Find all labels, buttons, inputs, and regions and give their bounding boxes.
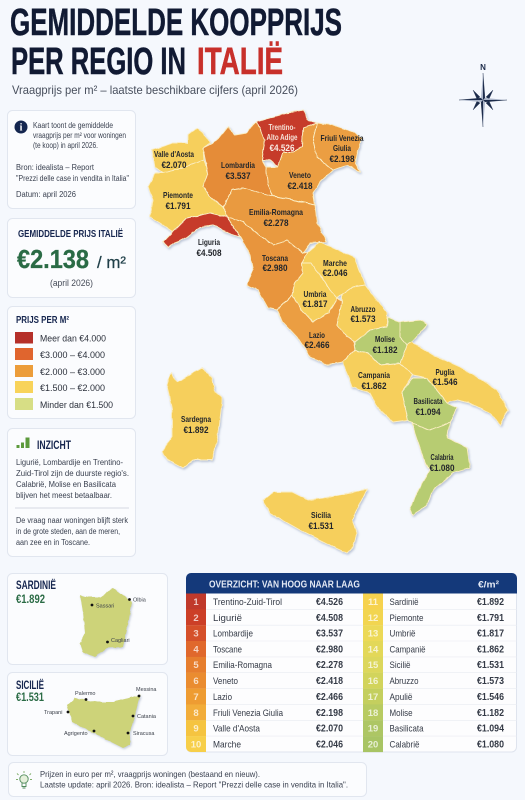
rank 9: Valle d'Aosta — [213, 724, 261, 734]
label: Trentino-Alto Adige: €4.526 — [270, 143, 294, 154]
panel: insight — [8, 428, 136, 556]
label: Liguria: Liguria — [198, 237, 220, 247]
legend item: 3000-4000: €3.000 – €4.000 — [40, 350, 105, 361]
rank 12: 12 — [368, 613, 378, 624]
legend item: below 1500: Minder dan €1.500 — [40, 400, 113, 411]
rank 18: €1.182 — [477, 708, 504, 719]
label: Lombardia: €3.537 — [226, 171, 250, 182]
panel: Sardinia inset — [8, 574, 168, 664]
label: Piemonte: Piemonte — [163, 190, 193, 200]
rank 1: €4.526 — [316, 597, 343, 608]
label: Umbria: €1.817 — [302, 299, 328, 310]
label: Umbria: Umbria — [304, 289, 327, 299]
label: Abruzzo: €1.573 — [350, 314, 376, 325]
label: Abruzzo: Abruzzo — [350, 304, 376, 314]
label: Lombardia: Lombardia — [221, 160, 255, 170]
rank 13: 13 — [368, 628, 378, 640]
rank 11: 11 — [368, 597, 379, 608]
rank 8 — [186, 704, 343, 720]
subtitle: Vraagprijs per m² – laatste beschikbare cijfers (april 2026) — [12, 83, 298, 97]
info description: vraagprijs per m² voor woningen — [33, 131, 126, 140]
insight text 1: Calabrië, Molise en Basilicata — [16, 480, 117, 489]
legend heading: PRIJS PER M² — [16, 314, 69, 326]
label: Liguria: €4.508 — [196, 248, 222, 259]
rank 14: 14 — [368, 644, 379, 656]
table header: €/m² — [478, 580, 499, 590]
rank 14: €1.862 — [477, 644, 504, 656]
rank 4 — [186, 641, 343, 657]
label: Basilicata: Basilicata — [414, 396, 443, 406]
rank 5: €2.278 — [316, 660, 343, 671]
footer text — [40, 769, 348, 790]
Sicily heading — [16, 679, 44, 704]
rank 11: Sardinië — [390, 597, 418, 608]
label: Liguria — [196, 237, 222, 259]
label: Campania: €1.862 — [362, 381, 386, 392]
insight heading: INZICHT — [37, 438, 71, 452]
icon: light bulb — [16, 771, 32, 788]
rank 15: Sicilië — [390, 660, 410, 671]
average value: €2.138 — [17, 244, 89, 274]
panel: ranking table — [186, 573, 517, 752]
label: Puglia — [432, 367, 458, 388]
rank 10 — [186, 736, 343, 752]
rank 15 — [363, 657, 504, 673]
label: Emilia-Romagna: Emilia-Romagna — [249, 207, 303, 217]
rank 1 — [186, 594, 343, 610]
legend item: 2000-3000: €2.000 – €3.000 — [40, 367, 105, 378]
label: Veneto — [288, 170, 312, 192]
label: Sardegna — [181, 414, 211, 436]
Sardinia cities: Cagliari — [111, 638, 130, 644]
rank 15: €1.531 — [477, 660, 504, 671]
rank 9 — [186, 720, 343, 736]
map of Italy — [148, 110, 508, 553]
label: Toscana — [262, 253, 288, 274]
Sicily cities: Agrigento — [64, 731, 88, 737]
rank 5: Emilia-Romagna — [213, 660, 273, 671]
title: PER REGIO IN — [11, 41, 186, 83]
rank 2: Ligurië — [213, 613, 242, 624]
rank 17 — [363, 689, 504, 705]
rank 16 — [363, 673, 504, 689]
label: Calabria: €1.080 — [430, 463, 454, 474]
rank 5 — [186, 657, 343, 673]
source and date — [16, 163, 129, 199]
rank 7: Lazio — [213, 692, 232, 703]
rank 12: €1.791 — [477, 613, 504, 624]
Sicily cities: Trapani — [44, 710, 62, 716]
insight text 2: in de grote steden, aan de meren, — [16, 527, 120, 536]
label: Lazio: €2.466 — [304, 340, 330, 351]
rank 10: 10 — [191, 740, 201, 750]
Sicily cities — [44, 687, 157, 737]
rank 7 — [186, 689, 343, 705]
label: Basilicata — [414, 396, 443, 418]
table header — [186, 573, 517, 594]
label: Molise: €1.182 — [372, 345, 398, 356]
rank 18: 18 — [368, 708, 378, 719]
rank 3: 3 — [193, 628, 199, 640]
average value: / m² — [97, 253, 126, 272]
rank 10: Marche — [213, 740, 241, 750]
rank 9: 9 — [193, 724, 199, 734]
Sardinia heading: €1.892 — [16, 594, 45, 606]
rank 17: 17 — [368, 692, 378, 703]
label: Friuli Venezia Giulia: Giulia — [333, 143, 351, 153]
panel: average price — [8, 218, 136, 298]
legend item: 1500-2000: €1.500 – €2.000 — [40, 383, 105, 394]
label: Friuli Venezia Giulia: Friuli Venezia — [320, 133, 364, 143]
Sicily island — [67, 695, 140, 748]
title: ITALIË — [197, 40, 283, 83]
info description: (te koop) in april 2026. — [33, 141, 98, 150]
label: Friuli Venezia Giulia: €2.198 — [330, 154, 354, 165]
rank 8: €2.198 — [316, 708, 343, 719]
average heading: GEMIDDELDE PRIJS ITALIË — [18, 227, 123, 240]
rank 8: 8 — [193, 708, 199, 719]
rank 18: Molise — [390, 708, 412, 719]
rank 3: €3.537 — [316, 628, 343, 640]
label: Toscana: €2.980 — [262, 263, 288, 274]
label: Emilia-Romagna: €2.278 — [264, 218, 288, 229]
label: Sardegna: Sardegna — [181, 414, 211, 424]
rank 13: Umbrië — [390, 628, 416, 640]
rank 2 — [186, 609, 343, 625]
label: Lazio: Lazio — [309, 330, 325, 340]
label: Veneto: Veneto — [289, 170, 311, 180]
label: Valle d'Aosta: Valle d'Aosta — [154, 149, 194, 159]
rank 16: €1.573 — [477, 676, 504, 687]
label: Sicilia: Sicilia — [311, 510, 331, 520]
legend item: above 4000: Meer dan €4.000 — [40, 334, 106, 344]
rank 20: Calabrië — [390, 740, 420, 750]
icon: compass rose: N — [480, 63, 486, 72]
rank 9: €2.070 — [316, 724, 343, 734]
map regions — [148, 110, 508, 553]
rank 14: Campanië — [390, 644, 426, 656]
rank 19: €1.094 — [477, 724, 504, 734]
label: Piemonte — [163, 190, 193, 212]
rank 20 — [363, 736, 504, 752]
rank 16: Abruzzo — [390, 676, 418, 687]
rank 1: 1 — [193, 597, 199, 608]
Sardinia heading — [16, 579, 56, 606]
insight text 1: Zuid-Tirol zijn de duurste regio's. — [16, 469, 129, 478]
label: Piemonte: €1.791 — [166, 201, 191, 212]
icon: bars — [16, 438, 30, 448]
rank 15: 15 — [368, 660, 379, 671]
source and date: Bron: idealista – Report — [16, 163, 95, 172]
label: Lazio — [304, 330, 330, 351]
rank 2: €4.508 — [316, 613, 343, 624]
Sicily heading: €1.531 — [16, 692, 44, 704]
label: Trentino-Alto Adige: Trentino- — [268, 122, 296, 132]
label: Valle d'Aosta: €2.070 — [162, 160, 186, 171]
rank 6 — [186, 673, 343, 689]
rank 6: Veneto — [213, 676, 238, 687]
rank 20: €1.080 — [477, 740, 504, 750]
title — [10, 2, 342, 83]
panel: footer note — [8, 762, 366, 796]
Sicily cities: Siracusa — [133, 731, 155, 737]
table header: OVERZICHT: VAN HOOG NAAR LAAG — [209, 578, 360, 590]
Sardinia cities — [91, 598, 147, 644]
Sicily heading: SICILIË — [16, 679, 44, 692]
rank 8: Friuli Venezia Giulia — [213, 708, 284, 719]
rank 14 — [363, 641, 504, 657]
rank 12 — [363, 609, 504, 625]
label: Marche: Marche — [323, 258, 347, 268]
label: Molise — [372, 334, 398, 356]
rank 3 — [186, 625, 343, 641]
Sicily cities: Palermo — [75, 691, 95, 697]
label: Friuli Venezia Giulia — [320, 133, 364, 165]
label: Basilicata: €1.094 — [416, 407, 441, 418]
rank 12: Piemonte — [390, 613, 424, 624]
rank 6: €2.418 — [316, 676, 343, 687]
label: Marche: €2.046 — [322, 268, 348, 279]
label: Campania — [358, 370, 390, 392]
source and date: "Prezzi delle case in vendita in Italia" — [16, 174, 129, 183]
label: Sardegna: €1.892 — [184, 425, 208, 436]
label: Sicilia: €1.531 — [308, 521, 334, 532]
rank 16: 16 — [368, 676, 378, 687]
label: Toscana: Toscana — [262, 253, 288, 263]
label: Calabria — [430, 452, 454, 474]
title: GEMIDDELDE KOOPPRIJS — [10, 2, 342, 44]
rank 17: Apulië — [390, 692, 412, 703]
info description: Kaart toont de gemiddelde — [33, 121, 113, 130]
label: Campania: Campania — [358, 370, 390, 380]
rank 10: €2.046 — [316, 740, 343, 750]
rank 19 — [363, 720, 504, 736]
rank 6: 6 — [193, 676, 199, 687]
Sicily cities: Catania — [137, 714, 157, 720]
rank 1: Trentino-Zuid-Tirol — [213, 597, 282, 608]
rank 17: €1.546 — [477, 692, 504, 703]
label: Abruzzo — [350, 304, 376, 325]
label: Marche — [322, 258, 348, 279]
icon: info: i — [20, 122, 23, 134]
insight text 2: De vraag naar woningen blijft sterk — [16, 516, 129, 525]
insight text 2: aan zee en in Toscane. — [16, 538, 90, 547]
rank 11 — [363, 594, 504, 610]
rank 2: 2 — [193, 613, 199, 624]
label: Veneto: €2.418 — [288, 181, 312, 192]
label: Sicilia — [308, 510, 334, 532]
rank 7: €2.466 — [316, 692, 343, 703]
source and date: Datum: april 2026 — [16, 190, 77, 199]
rank 11: €1.892 — [477, 597, 504, 608]
Sardinia cities: Sassari — [96, 604, 114, 610]
rank 19: Basilicata — [390, 724, 424, 734]
rank 7: 7 — [193, 692, 199, 703]
label: Trentino-Alto Adige — [266, 122, 298, 154]
label: Molise: Molise — [375, 334, 395, 344]
label: Puglia: Puglia — [436, 367, 455, 377]
rank 19: 19 — [368, 724, 378, 734]
label: Umbria — [302, 289, 328, 310]
Sardinia heading: SARDINIË — [16, 579, 56, 592]
rank 20: 20 — [368, 740, 378, 750]
footer text: Prijzen in euro per m², vraagprijs woningen (bestaand en nieuw). — [40, 769, 260, 779]
insight text 2 — [16, 516, 129, 547]
insight text 1: Ligurië, Lombardije en Trentino- — [16, 458, 123, 467]
insight text 1 — [16, 458, 129, 500]
rank 13: €1.817 — [477, 628, 504, 640]
rank 5: 5 — [193, 660, 199, 671]
rank 3: Lombardije — [213, 628, 253, 640]
label: Puglia: €1.546 — [432, 377, 458, 388]
Sardinia island — [80, 588, 132, 657]
panel: Sicily inset — [8, 672, 168, 756]
label: Emilia-Romagna — [249, 207, 303, 229]
average date: (april 2026) — [50, 278, 93, 288]
Sardinia cities: Olbia — [133, 598, 147, 604]
info description — [33, 121, 126, 150]
rank 4: Toscane — [213, 644, 242, 656]
rank 18 — [363, 704, 504, 720]
panel: info — [8, 110, 136, 208]
icon: compass rose — [459, 63, 507, 127]
Sicily cities: Messina — [136, 687, 157, 693]
label: Calabria: Calabria — [430, 452, 454, 462]
rank 4: €2.980 — [316, 644, 343, 656]
label: Valle d'Aosta — [154, 149, 194, 171]
rank 13 — [363, 625, 504, 641]
label: Lombardia — [221, 160, 255, 182]
label: Trentino-Alto Adige: Alto Adige — [266, 132, 298, 142]
insight text 1: blijven het meest betaalbaar. — [16, 491, 112, 500]
footer text: Laatste update: april 2026. Bron: idealista – Report "Prezzi delle case in vendita in Italia". — [40, 780, 348, 790]
panel: legend — [8, 306, 136, 418]
rank 4: 4 — [193, 644, 199, 656]
